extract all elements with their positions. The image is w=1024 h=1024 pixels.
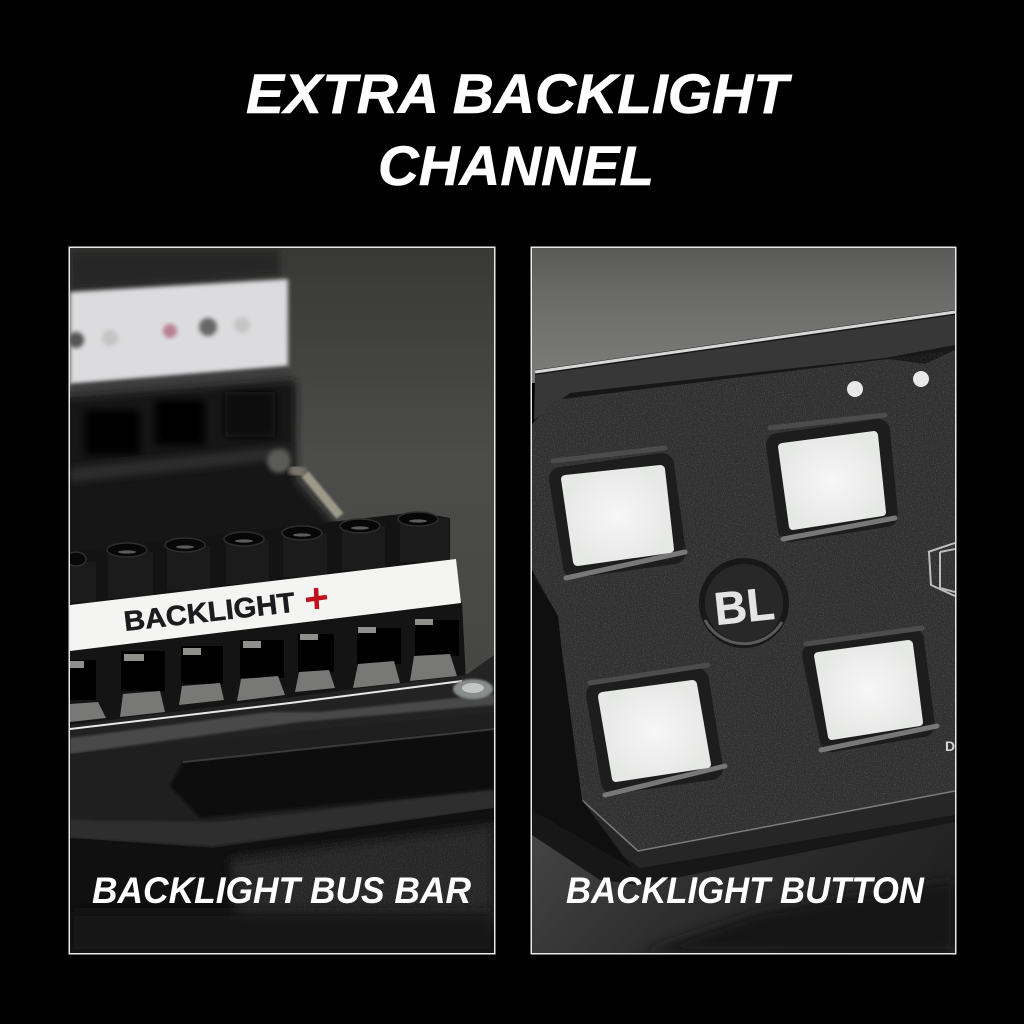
base plate [70, 655, 494, 953]
edge icon [928, 543, 955, 596]
title [246, 62, 793, 197]
BL badge [702, 561, 786, 645]
texture [532, 350, 955, 851]
title: CHANNEL [378, 134, 654, 197]
caption: backlight button: BACKLIGHT BUTTON [566, 870, 925, 911]
terminal strip [70, 511, 450, 605]
title: EXTRA BACKLIGHT [246, 62, 793, 125]
backlit buttons [553, 415, 937, 795]
BL badge: BL [712, 577, 777, 635]
panel: backlight button photo [532, 248, 955, 953]
caption: backlight bus bar: BACKLIGHT BUS BAR [92, 870, 471, 911]
panel: backlight bus bar photo [60, 248, 494, 953]
table surface [532, 815, 955, 953]
LED indicators [847, 371, 929, 397]
label strip [70, 559, 461, 651]
controller body [532, 310, 955, 885]
panel frames [69, 247, 956, 954]
edge letter: D [945, 738, 955, 754]
blurred rear bus bar [70, 250, 338, 552]
label strip: BACKLIGHT [122, 587, 297, 637]
wire [267, 449, 340, 516]
connector sockets [70, 602, 466, 728]
